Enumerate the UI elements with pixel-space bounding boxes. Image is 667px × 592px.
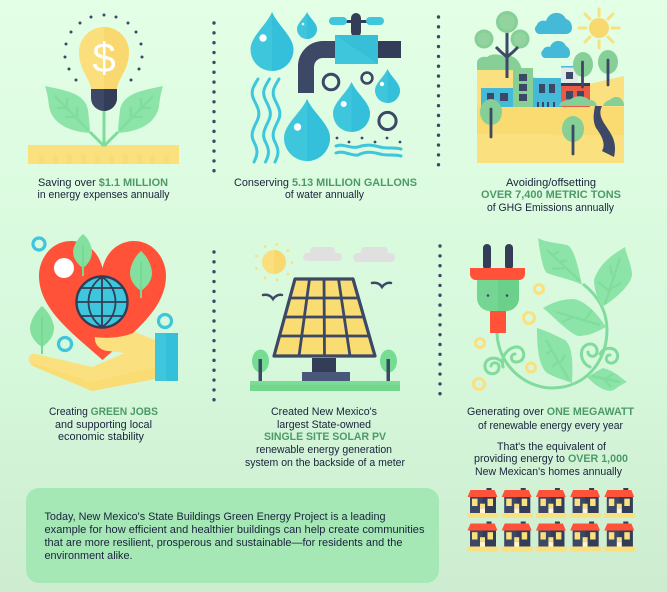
caption: solar PV: system on the backside of a meter <box>245 457 405 469</box>
caption: green jobs: Creating GREEN JOBS <box>49 406 158 418</box>
icon: plug and vine <box>470 238 632 391</box>
icon: light bulb plant: $ <box>92 34 116 81</box>
callout: summary: environment alike. <box>44 550 132 562</box>
caption: green jobs: economic stability <box>58 431 144 443</box>
icon: heart, globe and hand <box>29 234 178 391</box>
callout: summary: example for how efficient and healthier buildings can help create communities <box>44 524 425 536</box>
caption: emissions avoided: of GHG Emissions annually <box>487 202 614 214</box>
caption: home equivalent: providing energy to OVER 1,000 <box>474 453 628 465</box>
icon: town landscape <box>474 9 624 163</box>
caption: emissions avoided: Avoiding/offsetting <box>506 177 596 189</box>
caption: green jobs: and supporting local <box>55 419 152 431</box>
caption: emissions avoided: OVER 7,400 METRIC TONS <box>481 189 621 201</box>
icon: light bulb plant <box>28 14 179 164</box>
caption: solar PV: renewable energy generation <box>256 444 392 456</box>
caption: solar PV <box>245 406 405 469</box>
panel: green jobs <box>29 234 178 443</box>
icon: ten homes <box>468 488 635 552</box>
caption: home equivalent <box>474 441 628 478</box>
caption: solar PV: largest State-owned <box>277 419 371 431</box>
caption: green jobs <box>49 406 158 443</box>
icon: faucet and water drops <box>250 12 401 162</box>
caption: energy savings <box>38 177 170 201</box>
callout: summary: that are more resilient, prosperous and sustainable—for residents and the <box>44 537 402 549</box>
callout: summary <box>26 488 439 583</box>
caption: water conservation: Conserving 5.13 MILLION GALLONS <box>234 177 417 189</box>
caption: home equivalent: New Mexican's homes annually <box>475 466 622 478</box>
panel: water conservation <box>234 12 417 201</box>
caption: energy savings: in energy expenses annually <box>38 189 170 201</box>
panel: energy savings <box>28 14 179 201</box>
caption: water conservation: of water annually <box>285 189 364 201</box>
caption: energy savings: Saving over $1.1 MILLION <box>38 177 168 189</box>
caption: renewable energy <box>467 406 634 432</box>
callout: summary: Today, New Mexico's State Buildings Green Energy Project is a leading <box>44 511 386 523</box>
panel: solar PV <box>245 243 405 469</box>
caption: water conservation <box>234 177 417 201</box>
caption: renewable energy: of renewable energy every year <box>478 420 623 432</box>
caption: solar PV: SINGLE SITE SOLAR PV <box>264 431 387 443</box>
caption: emissions avoided <box>481 177 621 214</box>
caption: renewable energy: Generating over ONE MEGAWATT <box>467 406 634 418</box>
panel: emissions avoided <box>474 9 624 214</box>
caption: home equivalent: That's the equivalent of <box>497 441 607 453</box>
panel: renewable energy <box>467 238 635 552</box>
icon: solar panel <box>250 243 400 391</box>
caption: solar PV: Created New Mexico's <box>271 406 377 418</box>
